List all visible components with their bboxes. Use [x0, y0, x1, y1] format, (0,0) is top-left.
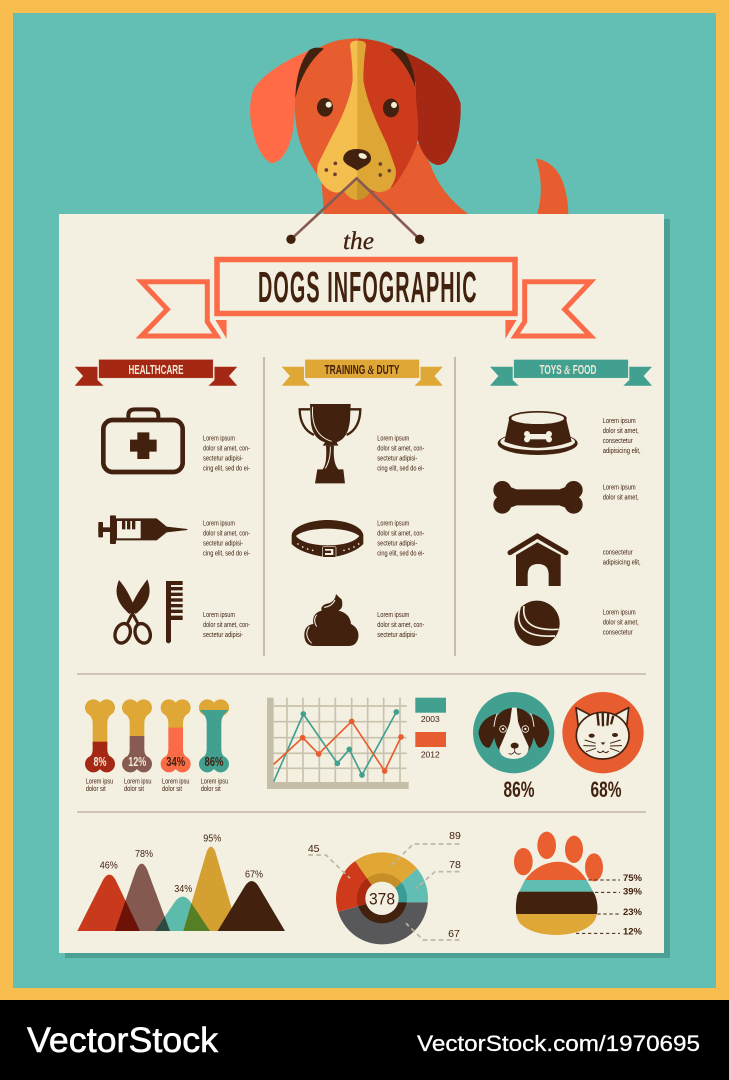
icon: comb [166, 581, 183, 643]
chart: bone percentages: 34% [166, 754, 186, 769]
text block: toys notes: consectetur [603, 629, 633, 636]
ribbon: training and duty: TRAINING & DUTY [324, 362, 400, 377]
chart: donut: 67 [448, 928, 460, 940]
chart: bone percentages: 86% [204, 754, 224, 769]
chart: mountain peaks: 78% [135, 849, 153, 860]
paper panel [59, 214, 664, 953]
legend [415, 698, 446, 760]
ribbon: healthcare [75, 359, 237, 386]
chart: bone percentages: 12% [128, 754, 147, 769]
ribbon: training and duty [282, 359, 443, 386]
icon: poop [304, 594, 358, 646]
title banner [141, 260, 591, 339]
text block: toys notes: Lorem ipsum [603, 418, 636, 425]
chart: bone percentages: dolor sit [162, 786, 182, 793]
chart: bone percentages: 8% [94, 754, 107, 769]
text block: healthcare notes: dolor sit amet, con- [203, 622, 251, 629]
text block: healthcare notes [203, 436, 251, 639]
icon: collar [292, 520, 363, 557]
icon: ball [514, 601, 560, 646]
text block: toys notes: adipisicing elit, [603, 448, 641, 455]
chart: donut: 78 [449, 859, 461, 871]
paper shadow [65, 219, 670, 958]
chart: donut: 89 [449, 830, 461, 842]
text block: healthcare notes: cing elit, sed do ei- [203, 466, 251, 473]
chart: paw print [510, 832, 643, 938]
text block: healthcare notes: Lorem ipsum [203, 612, 235, 619]
text block: training notes: sectetur adipisi- [377, 456, 418, 463]
text block: toys notes: Lorem ipsum [603, 609, 636, 616]
dog head [250, 38, 461, 200]
chart: bone percentages: Lorem ipsu [201, 778, 228, 785]
chart: mountain peaks: 34% [174, 884, 192, 895]
icon: syringe [98, 515, 187, 544]
text block: training notes: dolor sit amet, con- [377, 446, 425, 453]
footer logo text: VectorStock [27, 1021, 219, 1060]
icon: bone [493, 481, 583, 514]
title text: DOGS INFOGRAPHIC [258, 263, 478, 312]
chart: paw print: 23% [623, 907, 643, 918]
icon: trophy [300, 404, 360, 483]
text block: training notes: cing elit, sed do ei- [377, 466, 425, 473]
text block: training notes: Lorem ipsum [377, 436, 409, 443]
legend: 2012 [421, 750, 440, 760]
chart: bone percentages: Lorem ipsu [162, 778, 190, 785]
chart: mountain peaks: 67% [245, 869, 263, 880]
text block: healthcare notes: cing elit, sed do ei- [203, 551, 251, 558]
chart: line graph [267, 698, 409, 789]
sign strings held in mouth [286, 178, 424, 244]
dog badge [473, 692, 554, 773]
chart: mountain peaks [77, 833, 285, 931]
chart: paw print: 75% [623, 873, 643, 884]
icon: medical kit [103, 409, 183, 472]
text block: healthcare notes: sectetur adipisi- [203, 456, 244, 463]
text block: training notes [377, 436, 425, 639]
chart: bone percentages: dolor sit [124, 786, 144, 793]
text block: training notes: dolor sit amet, con- [377, 531, 425, 538]
text block: healthcare notes: Lorem ipsum [203, 436, 235, 443]
chart: mountain peaks: 95% [203, 833, 221, 844]
chart: bone percentages: dolor sit [86, 786, 106, 793]
percent: 68%: 68% [590, 777, 622, 802]
chart: mountain peaks: 46% [100, 861, 118, 872]
text block: toys notes: Lorem ipsum [603, 485, 636, 492]
chart: paw print: 12% [623, 926, 643, 938]
text block: training notes: Lorem ipsum [377, 612, 409, 619]
icon: scissors [112, 579, 153, 645]
text block: training notes: dolor sit amet, con- [377, 622, 425, 629]
text block: toys notes: consectetur [603, 438, 633, 445]
chart: paw print: 39% [623, 886, 643, 898]
title script: the: the [343, 228, 374, 255]
icon: dog house [510, 536, 566, 586]
footer bar [0, 1000, 729, 1080]
chart: bone percentages: dolor sit [201, 786, 221, 793]
text block: toys notes: adipisicing elit, [603, 560, 641, 567]
chart: donut: 378 [369, 890, 395, 908]
chart: donut [308, 832, 460, 944]
ribbon: healthcare: HEALTHCARE [128, 362, 184, 377]
text block: healthcare notes: sectetur adipisi- [203, 632, 244, 639]
text block: healthcare notes: Lorem ipsum [203, 521, 235, 528]
text block: healthcare notes: sectetur adipisi- [203, 541, 244, 548]
text block: training notes: cing elit, sed do ei- [377, 551, 425, 558]
text block: training notes: sectetur adipisi- [377, 632, 418, 639]
ribbon: toys and food: TOYS & FOOD [540, 362, 596, 377]
chart: bone percentages: Lorem ipsu [124, 778, 152, 785]
text block: toys notes [603, 418, 641, 636]
text block: healthcare notes: dolor sit amet, con- [203, 446, 251, 453]
percent: 86%: 86% [504, 777, 534, 802]
text block: toys notes: consectetur [603, 550, 633, 557]
icon: food bowl [498, 411, 578, 455]
footer url text: VectorStock.com/1970695 [417, 1031, 700, 1056]
chart: bone percentages [85, 699, 229, 793]
chart: donut: 45 [308, 843, 320, 855]
ribbon: toys and food [490, 359, 652, 386]
dog body and tail [322, 143, 568, 214]
chart: bone percentages: Lorem ipsu [86, 778, 113, 785]
text block: training notes: Lorem ipsum [377, 521, 409, 528]
legend: 2003 [421, 714, 440, 724]
text block: toys notes: dolor sit amet, [603, 495, 639, 502]
text block: toys notes: dolor sit amet, [603, 428, 639, 435]
cat badge [562, 692, 644, 773]
text block: healthcare notes: dolor sit amet, con- [203, 531, 251, 538]
text block: toys notes: dolor sit amet, [603, 619, 639, 626]
text block: training notes: sectetur adipisi- [377, 541, 418, 548]
